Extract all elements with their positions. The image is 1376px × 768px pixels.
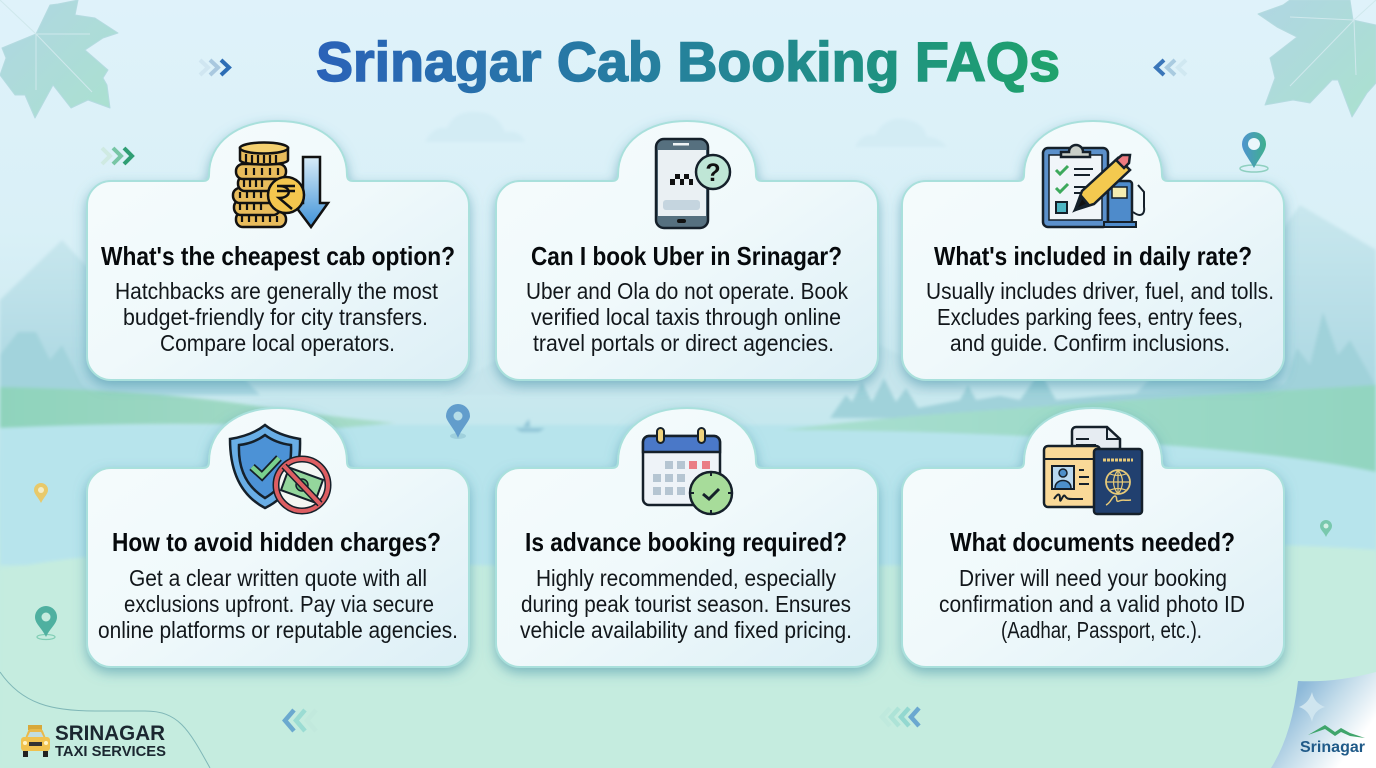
- body text: Compare local operators.: [160, 330, 395, 356]
- right mountains: [1130, 205, 1376, 400]
- left trees: [0, 332, 100, 395]
- icon: clipboard, pencil and fuel pump: [1043, 145, 1144, 227]
- body text: Excludes parking fees, entry fees,: [937, 304, 1243, 330]
- icon: ID card, document and passport: [1044, 427, 1142, 514]
- maple leaf: top left: [0, 0, 118, 118]
- body text: Usually includes driver, fuel, and tolls.: [926, 278, 1274, 304]
- body text: online platforms or reputable agencies.: [98, 617, 458, 643]
- card shape: [902, 408, 1284, 667]
- body text: exclusions upfront. Pay via secure: [124, 591, 434, 617]
- chevrons: title right: [1156, 60, 1186, 75]
- location pin: centre: [446, 404, 470, 439]
- left mountains: [0, 230, 260, 395]
- badge wordmark: Srinagar: [1300, 739, 1365, 756]
- chevrons: bottom centre: [882, 708, 919, 726]
- mountain mark: [1308, 725, 1365, 738]
- body text: during peak tourist season. Ensures: [521, 591, 851, 617]
- body text: verified local taxis through online: [531, 304, 841, 330]
- curl highlight: [1299, 692, 1325, 722]
- icon: phone with question: [656, 139, 730, 228]
- card shape: [496, 408, 878, 667]
- body text: vehicle availability and fixed pricing.: [520, 617, 852, 643]
- icon: phone with question: ?: [705, 159, 721, 187]
- chevrons: card one: [102, 148, 132, 164]
- chevrons: bottom left: [285, 710, 316, 731]
- bottom meadow: [0, 544, 1376, 768]
- heading: Can I book Uber in Srinagar?: [531, 241, 842, 271]
- boat: [515, 419, 545, 432]
- page corner: [1271, 672, 1376, 768]
- heading: What's included in daily rate?: [934, 241, 1252, 271]
- body text: Uber and Ola do not operate. Book: [526, 278, 848, 304]
- heading: What's the cheapest cab option?: [101, 241, 455, 271]
- panel: book Uber: [496, 121, 878, 380]
- footer curve line: [0, 672, 210, 768]
- card shape: [87, 408, 469, 667]
- icon: calendar with clock: [643, 428, 732, 514]
- right green shore: [782, 385, 1376, 472]
- maple leaf: top right: [1258, 0, 1376, 117]
- title: Srinagar Cab Booking FAQs: [316, 30, 1060, 93]
- panel: daily rate: [902, 121, 1284, 380]
- card shape: [87, 121, 469, 380]
- body text: Highly recommended, especially: [536, 565, 836, 591]
- heading: What documents needed?: [950, 527, 1235, 557]
- right trees: [830, 312, 1376, 420]
- body text: budget-friendly for city transfers.: [123, 304, 428, 330]
- logo tagline: TAXI SERVICES: [55, 743, 166, 760]
- panel: hidden charges: [87, 408, 469, 667]
- body text: Driver will need your booking: [959, 565, 1227, 591]
- body text: Hatchbacks are generally the most: [115, 278, 439, 304]
- icon: shield and crossed-out money: [230, 425, 328, 511]
- body text: Get a clear written quote with all: [129, 565, 427, 591]
- body text: and guide. Confirm inclusions.: [950, 330, 1230, 356]
- panel: advance booking: [496, 408, 878, 667]
- body text: confirmation and a valid photo ID: [939, 591, 1245, 617]
- location pin: top right: [1240, 132, 1268, 172]
- page curl with Srinagar badge: [1271, 672, 1376, 768]
- card shape: [496, 121, 878, 380]
- left green shore: [0, 387, 395, 428]
- footer logo: Srinagar Taxi Services: [21, 722, 166, 760]
- card shape: [902, 121, 1284, 380]
- body text: travel portals or direct agencies.: [533, 330, 834, 356]
- location pin: teal: [35, 606, 57, 640]
- heading: Is advance booking required?: [525, 527, 847, 557]
- heading: How to avoid hidden charges?: [112, 527, 441, 557]
- body text: (Aadhar, Passport, etc.).: [1001, 617, 1202, 643]
- middle mountains: [440, 330, 980, 395]
- distant clouds: [425, 112, 947, 147]
- location pin: yellow: [34, 483, 48, 503]
- chevrons: title left: [200, 60, 229, 75]
- logo wordmark: SRINAGAR: [55, 722, 165, 745]
- icon: coins with down arrow: [233, 142, 328, 227]
- panel: documents needed: [902, 408, 1284, 667]
- lake: [0, 425, 1376, 565]
- icon: taxi: [21, 725, 50, 757]
- location pin: small green: [1320, 520, 1332, 537]
- panel: cheapest cab option: [87, 121, 469, 380]
